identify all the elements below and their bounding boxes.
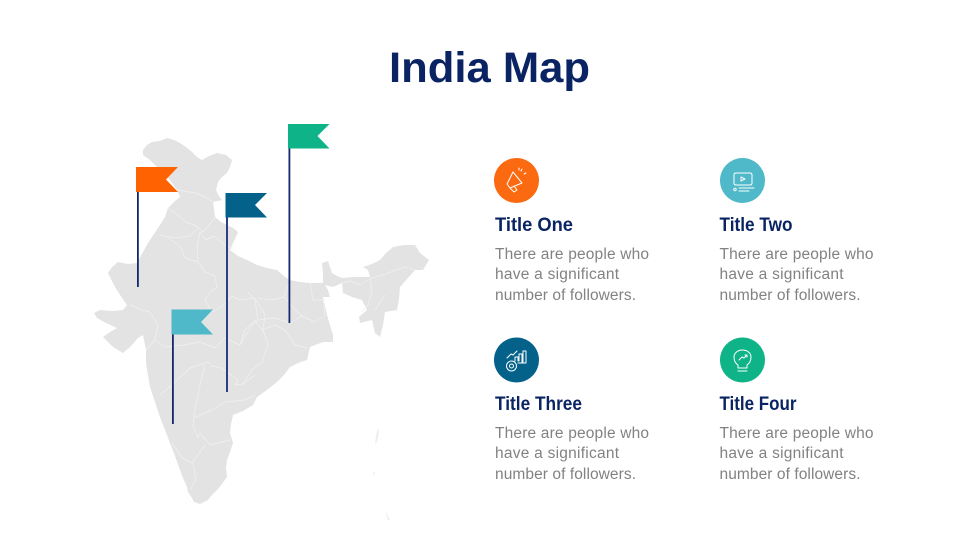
icon: growth chart xyxy=(494,338,539,382)
icon: megaphone xyxy=(494,158,539,203)
icon: video screen xyxy=(720,158,765,203)
description: have a significant xyxy=(720,266,844,283)
description: number of followers. xyxy=(720,466,860,483)
heading: Title Two xyxy=(720,215,792,236)
heading: Title Three xyxy=(495,394,582,415)
item: title two xyxy=(720,158,874,304)
item: title one xyxy=(494,158,649,304)
map of India xyxy=(94,138,429,520)
description: number of followers. xyxy=(495,466,636,483)
description: There are people who xyxy=(720,246,874,263)
title: India Map xyxy=(389,44,590,92)
description xyxy=(495,246,649,304)
item: title four xyxy=(720,338,874,483)
flag: orange xyxy=(136,167,178,287)
flag: teal xyxy=(172,310,213,424)
description: number of followers. xyxy=(495,287,636,304)
description: There are people who xyxy=(495,246,649,263)
description: have a significant xyxy=(495,266,620,283)
description: have a significant xyxy=(720,445,844,462)
description xyxy=(720,425,874,483)
item: title three xyxy=(494,338,649,483)
description xyxy=(720,246,874,304)
description: number of followers. xyxy=(720,287,860,304)
flag: dark blue xyxy=(226,193,267,392)
description: have a significant xyxy=(495,445,620,462)
heading: Title Four xyxy=(720,394,797,415)
flag: green xyxy=(288,124,330,323)
icon: light bulb xyxy=(720,338,765,382)
description: There are people who xyxy=(720,425,874,442)
description: There are people who xyxy=(495,425,649,442)
description xyxy=(495,425,649,483)
heading: Title One xyxy=(495,215,573,236)
